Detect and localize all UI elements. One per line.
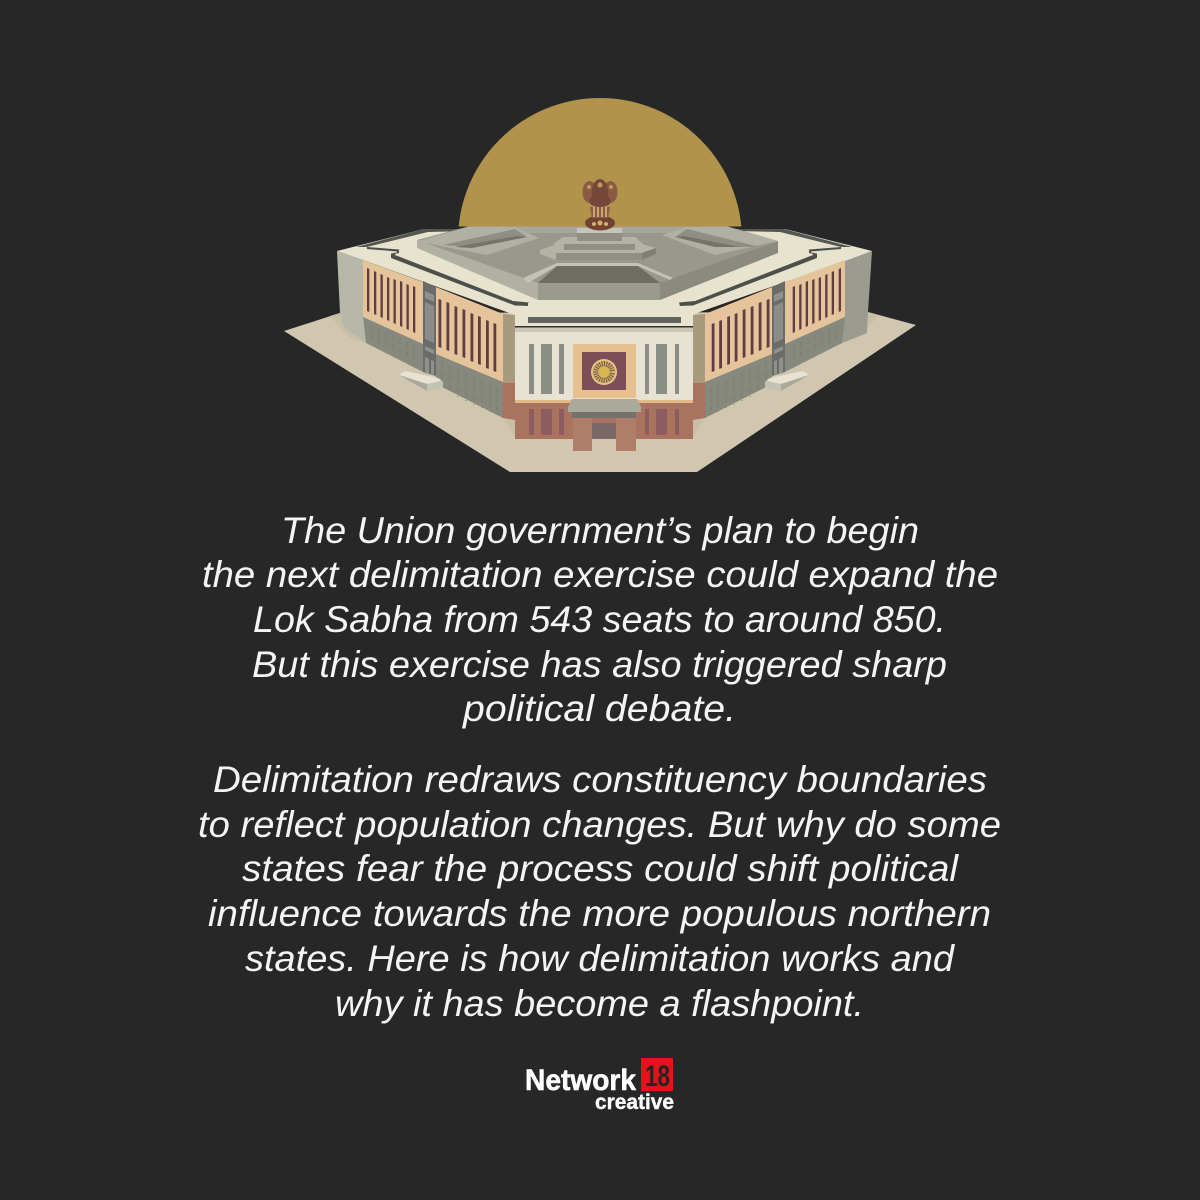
text block: explanation paragraph	[198, 759, 1001, 1024]
text block: explanation paragraph: Delimitation redraws constituency boundaries	[213, 759, 987, 800]
infographic canvas	[200, 98, 1000, 1110]
logo: Network18 creative: creative	[595, 1091, 674, 1114]
text block: explanation paragraph: to reflect population changes. But why do some	[198, 804, 1001, 845]
text block: intro paragraph: But this exercise has also triggered sharp	[252, 644, 947, 685]
illustration: new Parliament building	[284, 179, 916, 472]
wall shadows on ground	[330, 312, 878, 437]
window slits upper	[529, 344, 679, 394]
ground plinth	[284, 312, 916, 472]
text block: explanation paragraph: states fear the process could shift political	[242, 848, 960, 889]
upper roof	[417, 226, 778, 300]
right wing facade	[679, 229, 852, 420]
central terrace step	[528, 303, 681, 317]
text block: explanation paragraph: influence towards the more populous northern	[208, 893, 991, 934]
central skylight	[523, 263, 673, 283]
logo: Network18 creative: 18	[645, 1060, 670, 1093]
text block: intro paragraph	[202, 510, 998, 729]
sun semicircle	[458, 98, 742, 226]
text block: intro paragraph: Lok Sabha from 543 seats to around 850.	[253, 599, 946, 640]
left end wall	[337, 251, 366, 343]
text block: intro paragraph: The Union government’s plan to begin	[281, 510, 919, 551]
text block: explanation paragraph: why it has become a flashpoint.	[335, 983, 864, 1024]
main roof terrace	[337, 229, 872, 327]
top block	[577, 228, 622, 241]
text block: intro paragraph: political debate.	[462, 688, 736, 729]
right end wall	[842, 251, 872, 343]
lower stepped plinth	[540, 244, 656, 260]
left wing facade	[356, 229, 529, 420]
central facade	[515, 317, 693, 451]
text block: explanation paragraph: states. Here is how delimitation works and	[245, 938, 955, 979]
Ashoka chakra panel	[573, 344, 636, 398]
entrance	[573, 418, 636, 451]
window slits lower	[529, 409, 679, 435]
icon: national emblem	[582, 179, 618, 230]
right roof well	[662, 227, 778, 255]
middle stepped plinth	[553, 237, 643, 250]
entrance canopy	[568, 399, 641, 418]
text block: intro paragraph: the next delimitation exercise could expand the	[202, 554, 998, 595]
left roof well	[418, 227, 539, 255]
logo: Network18 creative: Network	[525, 1064, 636, 1097]
logo: Network18 creative	[525, 1058, 674, 1114]
